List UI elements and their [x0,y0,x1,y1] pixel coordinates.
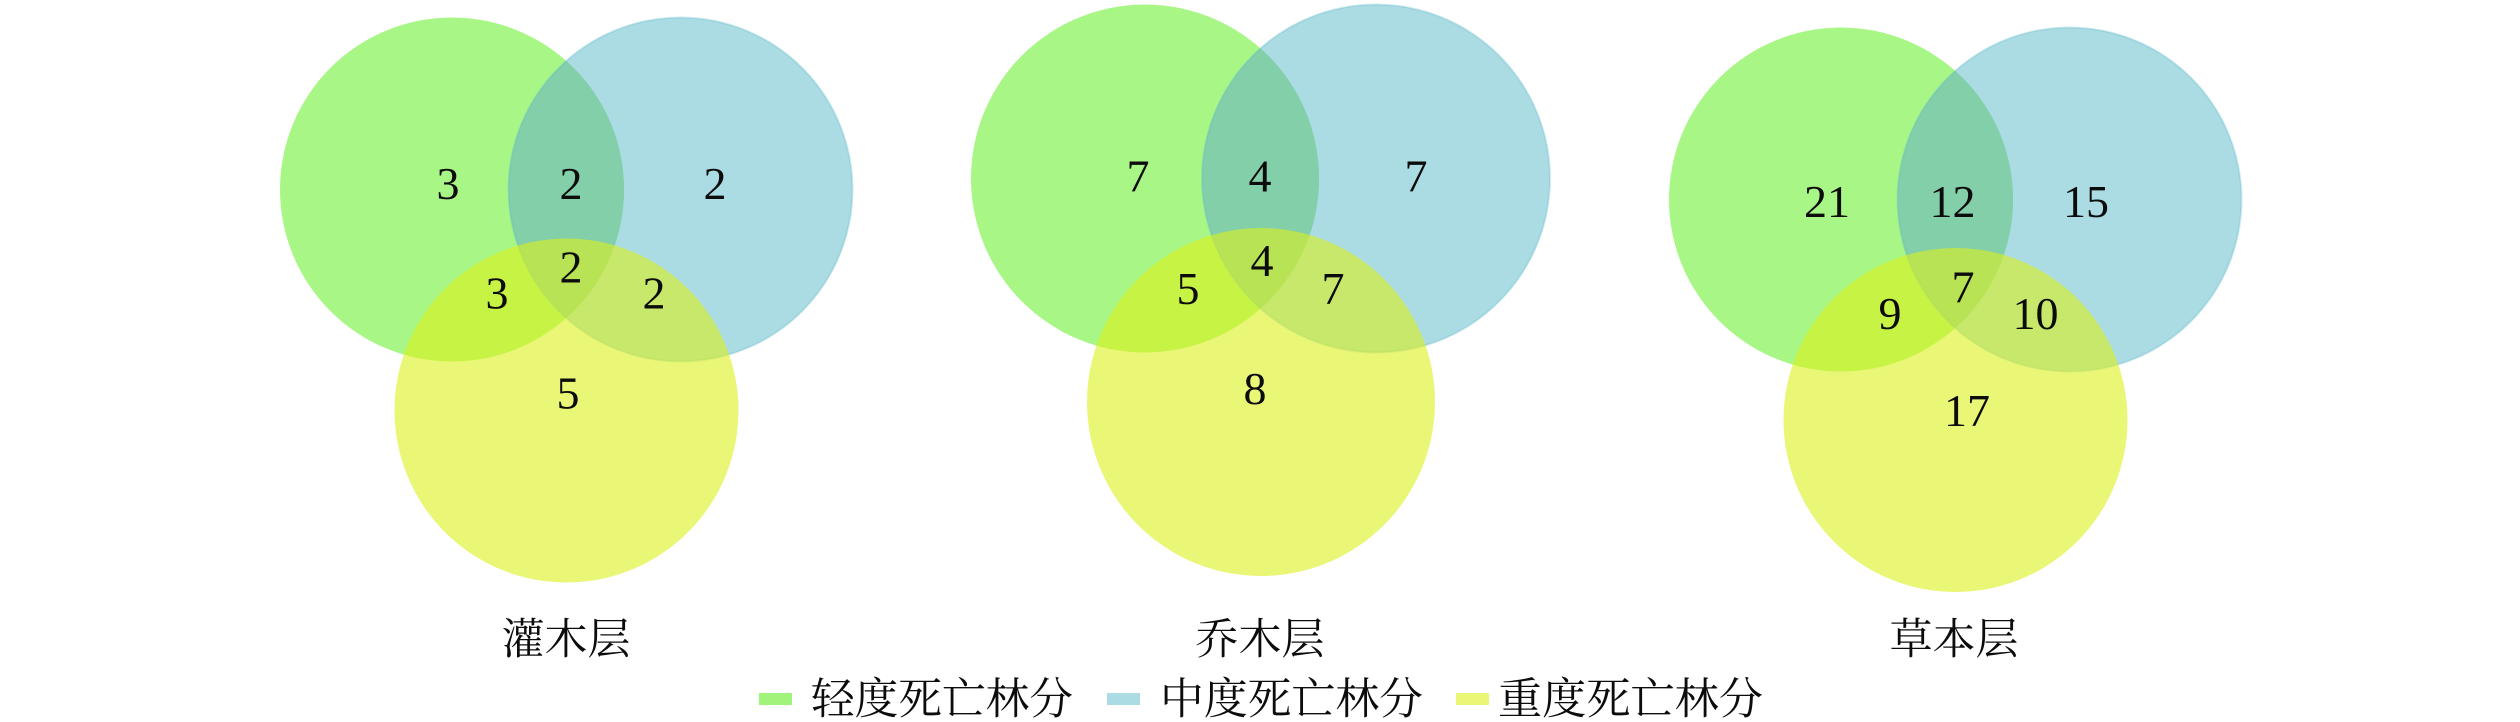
panel: tree layer venn diagram [971,4,1550,664]
values: shrub layer: 3 [486,268,508,318]
circle: moderate mortality [1202,4,1550,352]
values: shrub layer: 3 [436,158,460,209]
values: tree layer: 8 [1244,363,1266,414]
values: tree layer [1126,150,1428,414]
values: tree layer: 4 [1248,150,1272,202]
values: herb layer: 7 [1952,262,1974,312]
circle: severe mortality [1087,228,1435,576]
overlap: light and moderate [1202,48,1319,235]
panel: shrub layer venn diagram [280,18,852,664]
values: shrub layer: 2 [642,268,666,318]
values: herb layer [1804,176,2109,436]
values: tree layer: 7 [1126,150,1150,202]
values: herb layer: 9 [1878,288,1902,339]
circle: light mortality [1669,28,2013,372]
values: shrub layer [436,158,726,418]
values: herb layer: 10 [2012,288,2058,339]
values: tree layer: 5 [1176,263,1200,314]
values: tree layer: 7 [1404,150,1428,202]
overlap: light and moderate [1898,72,2013,254]
values: shrub layer: 5 [556,368,580,418]
circle: light mortality [280,18,624,362]
values: herb layer: 15 [2063,176,2109,227]
heading: herb layer: 草本层 [1890,617,2018,664]
circle: light mortality [971,4,1319,352]
values: shrub layer: 2 [704,158,726,209]
values: tree layer: 4 [1250,235,1274,286]
values: herb layer: 17 [1944,385,1990,436]
values: herb layer: 12 [1930,176,1976,227]
circle: severe mortality [394,238,738,582]
values: tree layer: 7 [1322,263,1344,314]
circle: severe mortality [1784,248,2128,592]
values: herb layer: 21 [1804,176,1850,227]
values: shrub layer: 2 [560,242,582,292]
heading: tree layer: 乔木层 [1196,617,1324,664]
values: shrub layer: 2 [560,158,582,209]
legend [759,676,1763,722]
circle: moderate mortality [1898,28,2242,372]
heading: shrub layer: 灌木层 [502,617,630,664]
panel: herb layer venn diagram [1669,28,2242,664]
circle: moderate mortality [508,18,852,362]
overlap: light and moderate [508,62,624,246]
